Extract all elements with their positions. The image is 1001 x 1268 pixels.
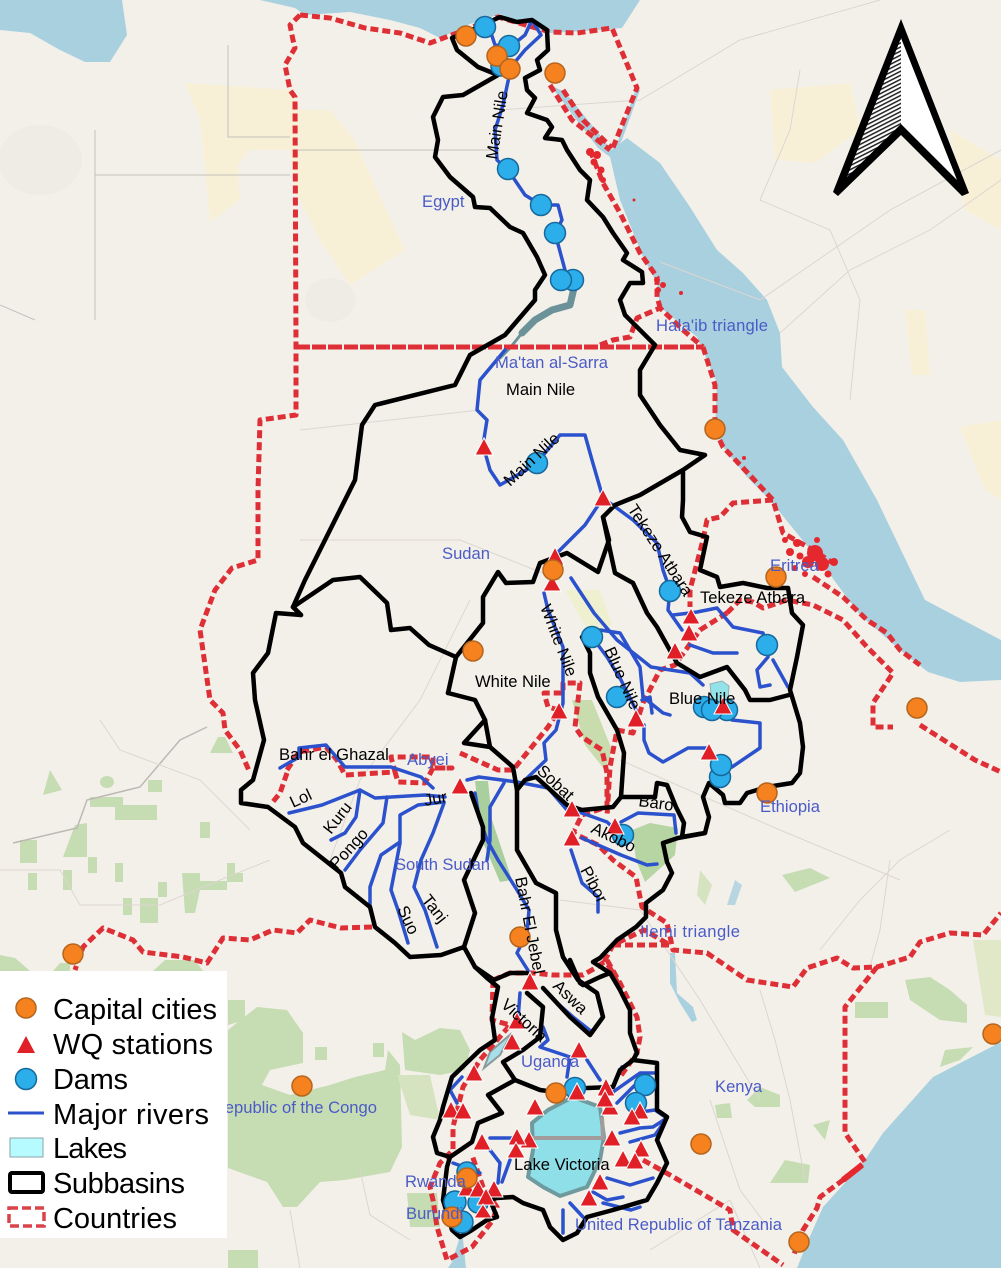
subbasin and river labels: Bahr el Ghazal bbox=[279, 745, 389, 764]
lake: Tana bbox=[710, 681, 729, 702]
legend: countries: Countries bbox=[53, 1203, 177, 1235]
water quality stations bbox=[442, 438, 732, 1218]
subbasin and river labels: Akobo bbox=[588, 819, 639, 856]
subbasin and river labels: Lake Victoria bbox=[514, 1155, 610, 1174]
legend: major rivers: Major rivers bbox=[53, 1099, 209, 1131]
subbasin and river labels: Tekeze Atbara bbox=[624, 501, 697, 600]
country labels: Ilemi triangle bbox=[640, 922, 740, 941]
country labels: Eritrea bbox=[770, 556, 820, 575]
subbasin and river labels: Tekeze Atbara bbox=[700, 588, 806, 607]
country labels: Burundi bbox=[406, 1204, 463, 1223]
subbasin and river labels: Victoria bbox=[497, 995, 552, 1046]
country labels: Hala'ib triangle bbox=[656, 316, 768, 335]
base map: desert patches bbox=[185, 83, 1001, 635]
legend: capital cities: Capital cities bbox=[53, 994, 217, 1026]
country labels: United Republic of Tanzania bbox=[575, 1215, 783, 1234]
country labels: Sudan bbox=[442, 544, 490, 563]
base map: inland lakes bbox=[448, 880, 742, 1268]
legend: dams: Dams bbox=[53, 1064, 128, 1096]
legend background bbox=[0, 971, 227, 1238]
country labels: Uganda bbox=[521, 1052, 580, 1071]
country labels: Democratic Republic of the Congo bbox=[124, 1098, 377, 1117]
subbasin and river labels: Bahr El Jebel bbox=[511, 875, 549, 976]
subbasin and river labels: Main Nile bbox=[500, 429, 563, 490]
country labels: Egypt bbox=[422, 192, 465, 211]
subbasin and river labels: Main Nile bbox=[482, 89, 512, 161]
subbasin and river labels: Aswa bbox=[549, 976, 592, 1019]
country labels: South Sudan bbox=[395, 855, 490, 874]
major rivers bbox=[280, 20, 788, 1233]
subbasin and river labels: Lol bbox=[287, 785, 315, 812]
subbasin and river labels: White Nile bbox=[475, 672, 551, 691]
subbasin and river labels: Sobat bbox=[533, 761, 578, 805]
country labels: Abyei bbox=[407, 750, 449, 769]
legend: lakes bbox=[10, 1133, 127, 1165]
legend: subbasins: Subbasins bbox=[53, 1168, 185, 1200]
subbasin and river labels: Jur bbox=[422, 787, 449, 810]
subbasin and river labels bbox=[279, 89, 806, 1174]
capital cities bbox=[456, 26, 476, 46]
legend: dams bbox=[16, 1064, 128, 1096]
legend: lakes: Lakes bbox=[53, 1133, 127, 1165]
subbasin and river labels: Blue Nile bbox=[669, 689, 735, 708]
subbasin and river labels: Kuru bbox=[319, 798, 356, 837]
subbasin and river labels: Blue Nile bbox=[600, 644, 645, 712]
subbasin and river labels: Main Nile bbox=[506, 380, 575, 399]
base map: desert hills bbox=[0, 125, 355, 322]
north arrow bbox=[833, 19, 969, 196]
country labels: Ma'tan al-Sarra bbox=[495, 353, 609, 372]
legend bbox=[0, 971, 227, 1238]
country labels: Ethiopia bbox=[760, 797, 821, 816]
subbasin boundaries bbox=[241, 17, 803, 1240]
legend: WQ stations: WQ stations bbox=[53, 1029, 213, 1061]
lake: Albert bbox=[484, 1033, 512, 1068]
subbasin and river labels: White Nile bbox=[536, 602, 581, 679]
base map: forest and reserve patches bbox=[0, 700, 1001, 1268]
subbasin and river labels: Suo bbox=[393, 903, 423, 937]
lake: Victoria bbox=[528, 1097, 604, 1196]
subbasin and river labels: Pongo bbox=[326, 824, 372, 873]
country labels: Rwanda bbox=[405, 1172, 467, 1191]
lake: Nasser bbox=[500, 288, 574, 358]
country labels: Kenya bbox=[715, 1077, 763, 1096]
subbasin and river labels: Pibor bbox=[576, 863, 612, 906]
country labels bbox=[124, 192, 821, 1234]
subbasin and river labels: Baro bbox=[637, 791, 675, 815]
coastal border clusters bbox=[586, 148, 862, 1180]
dams bbox=[444, 16, 778, 1233]
subbasin and river labels: Tanj bbox=[418, 891, 452, 926]
